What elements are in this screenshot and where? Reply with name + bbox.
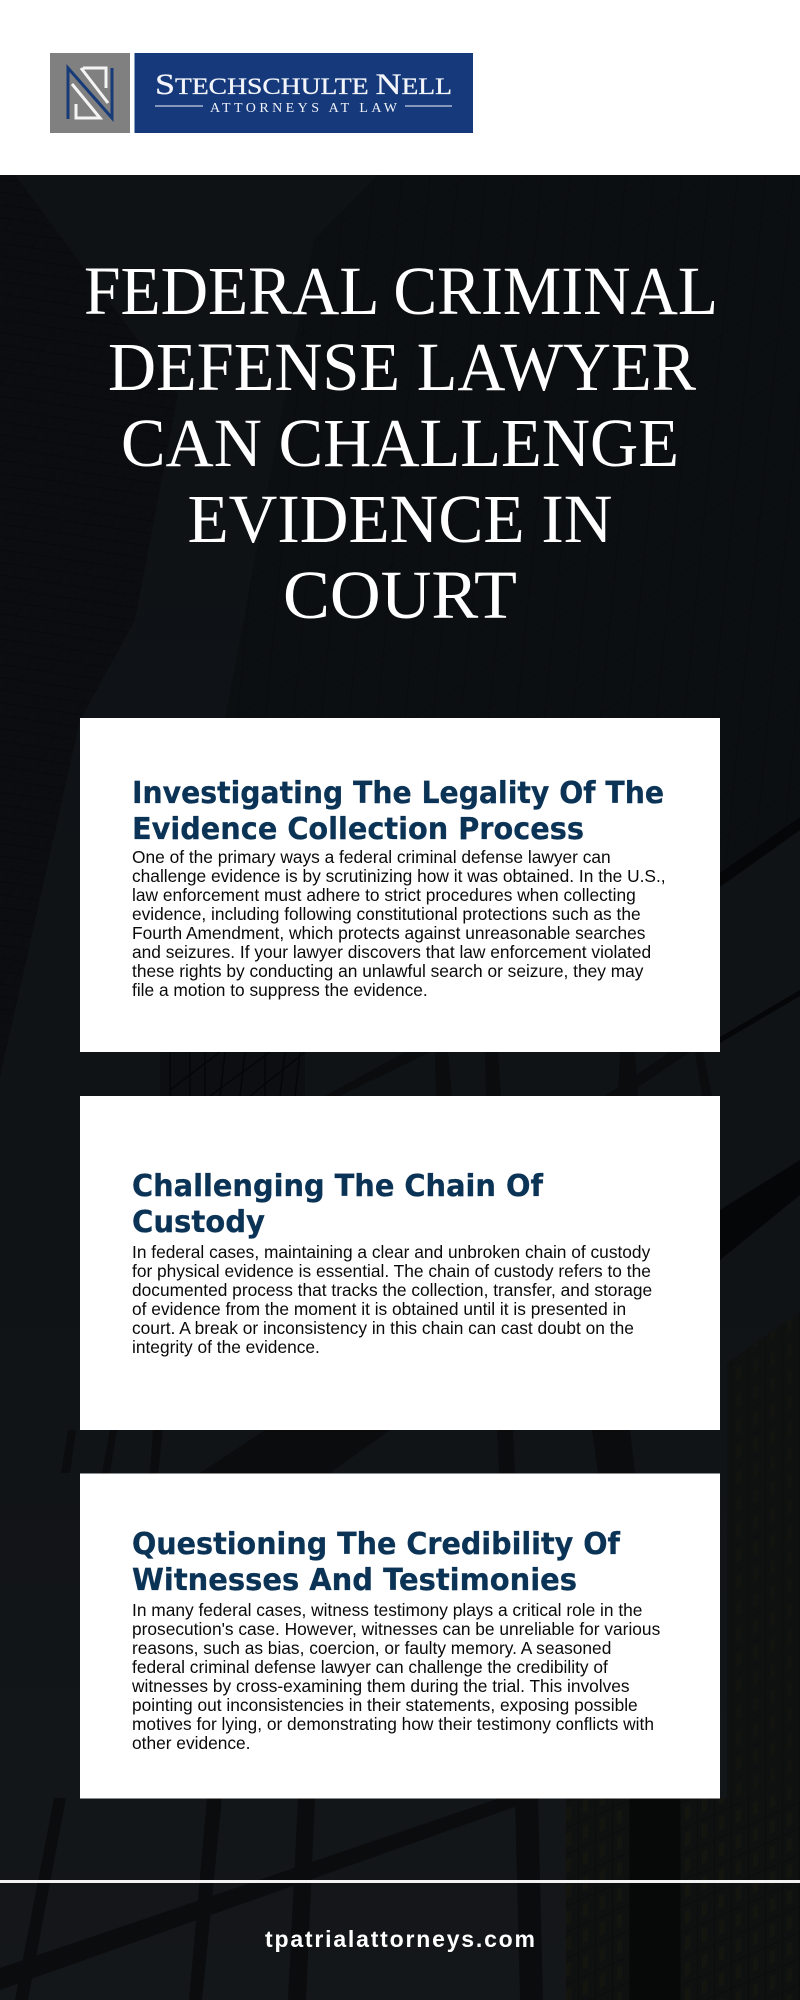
- title: COURT: [283, 557, 517, 633]
- heading: evidence collection: Evidence Collection Process: [132, 812, 584, 847]
- heading: evidence collection: [132, 776, 664, 847]
- text: evidence collection: file a motion to suppress the evidence.: [132, 980, 428, 1000]
- heading: chain of custody: [132, 1169, 544, 1240]
- text: evidence collection: challenge evidence is by scrutinizing how it was obtained. In the U.S.,: [132, 866, 666, 886]
- text: evidence collection: One of the primary ways a federal criminal defense lawyer can: [132, 847, 611, 867]
- text: chain of custody: documented process that tracks the collection, transfer, and storage: [132, 1280, 652, 1300]
- title: FEDERAL CRIMINAL: [84, 253, 718, 329]
- text: witness credibility: other evidence.: [132, 1733, 250, 1753]
- title: [84, 253, 718, 633]
- header background: [0, 0, 800, 175]
- text: witness credibility: prosecution's case. However, witnesses can be unreliable for various: [132, 1619, 661, 1639]
- text: witness credibility: federal criminal defense lawyer can challenge the credibility of: [132, 1657, 608, 1677]
- heading: chain of custody: Custody: [132, 1205, 265, 1240]
- logo wordmark: STECHSCHULTE NELL: [155, 68, 452, 101]
- text: chain of custody: [132, 1242, 652, 1357]
- text: chain of custody: court. A break or inconsistency in this chain can cast doubt on the: [132, 1318, 634, 1338]
- structural beams: [0, 817, 800, 2000]
- logo wordmark: [134, 53, 473, 133]
- logo mark: [50, 53, 130, 133]
- heading: witness credibility: Questioning The Credibility Of: [132, 1527, 621, 1562]
- text: witness credibility: witnesses by cross-examining them during the trial. This involves: [131, 1676, 630, 1696]
- text: evidence collection: Fourth Amendment, which protects against unreasonable searches: [132, 923, 646, 943]
- text: witness credibility: [131, 1600, 661, 1753]
- panel: chain of custody: [80, 1096, 720, 1430]
- panel: evidence collection: [80, 718, 720, 1052]
- footer divider: [0, 1880, 800, 1883]
- text: evidence collection: and seizures. If your lawyer discovers that law enforcement violated: [132, 942, 651, 962]
- heading: chain of custody: Challenging The Chain Of: [132, 1169, 544, 1204]
- text: chain of custody: In federal cases, maintaining a clear and unbroken chain of custody: [132, 1242, 651, 1262]
- panel: witness credibility: [80, 1474, 720, 1798]
- text: evidence collection: [132, 847, 666, 1000]
- text: chain of custody: of evidence from the moment it is obtained until it is presented in: [132, 1299, 626, 1319]
- text: witness credibility: In many federal cases, witness testimony plays a critical role in the: [132, 1600, 642, 1620]
- logo: [50, 53, 473, 133]
- text: chain of custody: for physical evidence is essential. The chain of custody refers to the: [132, 1261, 651, 1281]
- text: evidence collection: law enforcement must adhere to strict procedures when collecting: [132, 885, 636, 905]
- text: witness credibility: reasons, such as bias, coercion, or faulty memory. A seasoned: [132, 1638, 611, 1658]
- text: evidence collection: these rights by conducting an unlawful search or seizure, they may: [132, 961, 644, 981]
- heading: witness credibility: [132, 1527, 621, 1598]
- footer website: tpatrialattorneys.com: [265, 1926, 535, 1952]
- title: CAN CHALLENGE: [121, 405, 679, 481]
- heading: evidence collection: Investigating The Legality Of The: [132, 776, 664, 811]
- title: DEFENSE LAWYER: [108, 329, 696, 405]
- heading: witness credibility: Witnesses And Testimonies: [132, 1563, 577, 1598]
- text: witness credibility: motives for lying, or demonstrating how their testimony conflicts with: [132, 1714, 654, 1734]
- text: chain of custody: integrity of the evidence.: [132, 1337, 320, 1357]
- right building, lower: [727, 1312, 800, 1880]
- text: witness credibility: pointing out inconsistencies in their statements, exposing possible: [132, 1695, 638, 1715]
- logo wordmark: ATTORNEYS AT LAW: [210, 101, 398, 116]
- text: evidence collection: evidence, including following constitutional protections such as the: [132, 904, 641, 924]
- title: EVIDENCE IN: [188, 481, 612, 557]
